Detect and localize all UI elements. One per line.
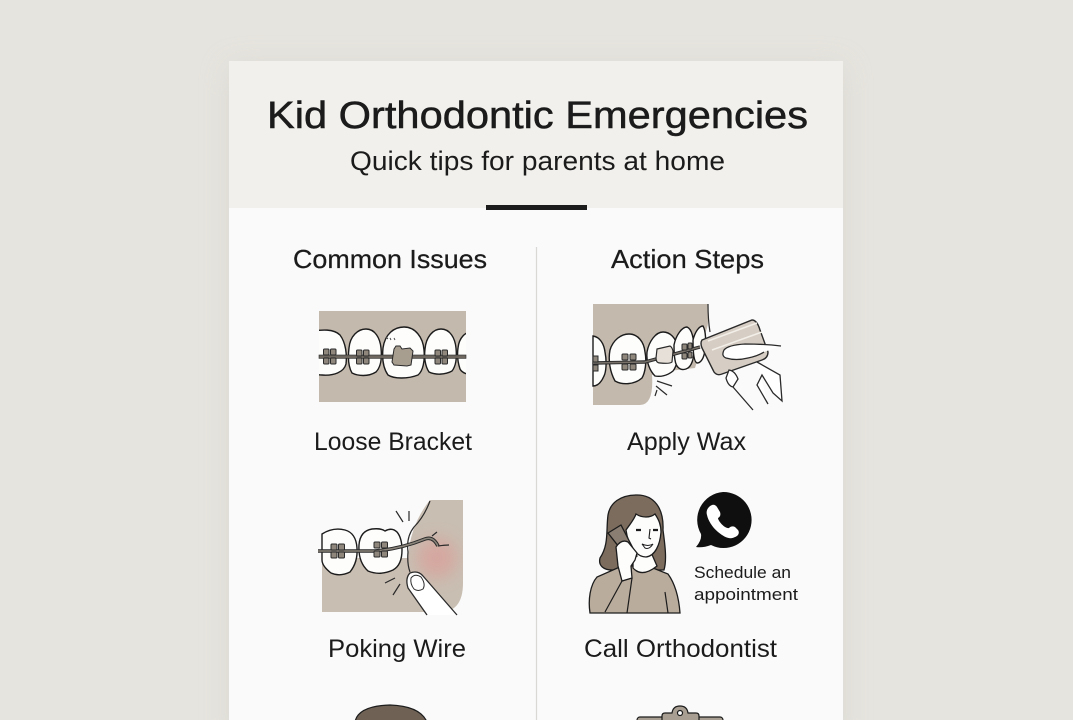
caption: schedule an appointment: Schedule an	[694, 563, 791, 582]
caption: schedule an appointment	[694, 563, 798, 604]
heading: action steps: Action Steps	[611, 244, 764, 274]
caption: schedule an appointment: appointment	[694, 585, 798, 604]
illustration: poking wire	[318, 500, 463, 615]
heading: common issues: Common Issues	[293, 244, 487, 274]
label: apply wax: Apply Wax	[627, 428, 746, 456]
icon: phone chat bubble	[696, 492, 752, 548]
illustration: woman on phone	[589, 495, 680, 613]
illustration: head, partially cropped	[355, 705, 427, 720]
illustration: loose bracket	[318, 311, 466, 402]
header band	[229, 61, 843, 210]
label: poking wire: Poking Wire	[328, 635, 466, 663]
title: Kid Orthodontic Emergencies	[267, 95, 808, 137]
label: call orthodontist: Call Orthodontist	[584, 635, 777, 663]
illustration: apply wax	[593, 304, 782, 410]
infographic canvas	[229, 61, 843, 720]
subtitle: Quick tips for parents at home	[350, 146, 725, 176]
label: loose bracket: Loose Bracket	[314, 428, 472, 456]
header accent bar	[486, 205, 587, 210]
panel: card	[229, 61, 843, 720]
illustration: clipboard, partially cropped	[637, 706, 723, 720]
